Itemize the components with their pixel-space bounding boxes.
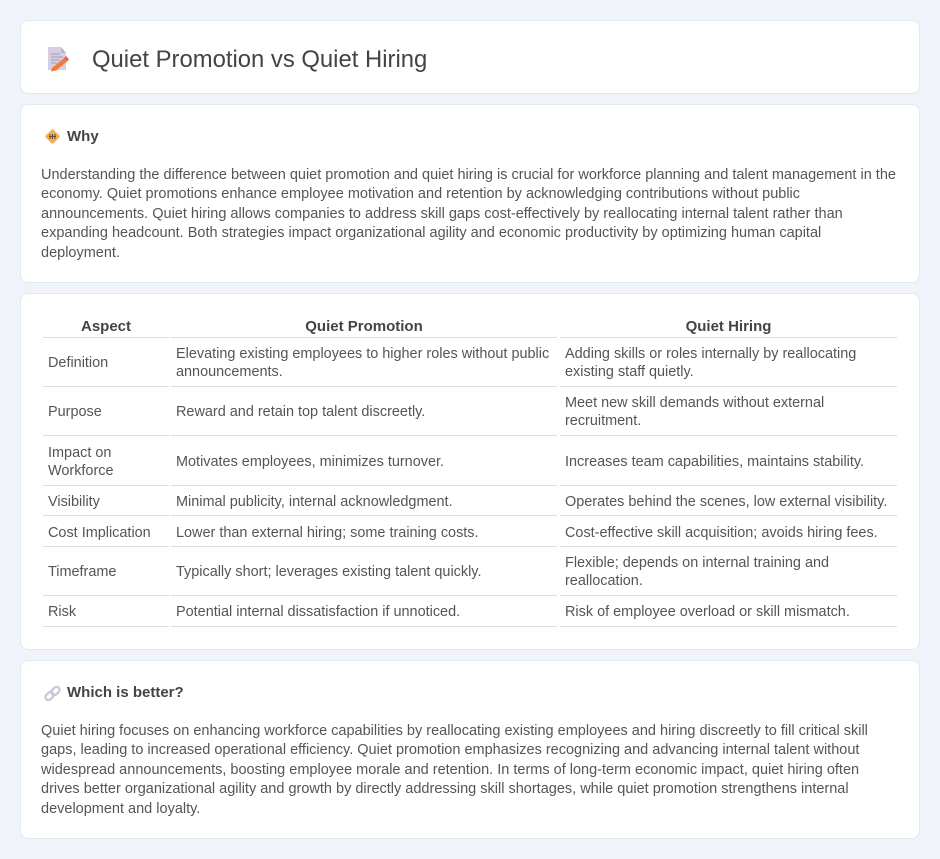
row: cost implication: Cost-effective skill acquisition; avoids hiring fees. xyxy=(565,525,878,541)
text block: why paragraph: deployment. xyxy=(41,245,120,261)
row: risk: Potential internal dissatisfaction if unnoticed. xyxy=(176,604,460,620)
text block: which is better paragraph xyxy=(41,723,868,817)
table header: Aspect xyxy=(81,318,131,335)
table header: Quiet Promotion xyxy=(305,318,423,335)
heading: which is better: Which is better? xyxy=(67,684,184,701)
text block: which is better paragraph: drives better organizational agility and growth by directly addressing skill shortages, while quiet promotion strengthens internal xyxy=(41,781,849,797)
row: impact on workforce: Motivates employees, minimizes turnover. xyxy=(176,454,444,470)
row: impact on workforce xyxy=(43,445,897,486)
row: risk xyxy=(43,604,897,627)
icon: document with pencil xyxy=(48,47,69,72)
heading: why: Why xyxy=(67,128,99,145)
row: definition: announcements. xyxy=(176,364,283,380)
row: purpose: Reward and retain top talent discreetly. xyxy=(176,404,425,420)
row: definition: Definition xyxy=(48,355,108,371)
text block: why paragraph: expanding headcount. Both strategies impact organizational agility and economic productivity by optimizing human capital xyxy=(41,225,821,241)
row: definition: Adding skills or roles internally by reallocating xyxy=(565,346,856,362)
row: risk: Risk of employee overload or skill mismatch. xyxy=(565,604,850,620)
row: visibility: Operates behind the scenes, low external visibility. xyxy=(565,494,887,510)
text block: which is better paragraph: widespread announcements, boosting employee morale and retention. In terms of long-term economic impact, quiet hiring often xyxy=(41,762,859,778)
row: timeframe: Typically short; leverages existing talent quickly. xyxy=(176,564,481,580)
row: impact on workforce: Increases team capabilities, maintains stability. xyxy=(565,454,864,470)
row: definition: existing staff quietly. xyxy=(565,364,694,380)
row: definition xyxy=(43,346,897,387)
row: timeframe: Timeframe xyxy=(48,564,116,580)
table header: Quiet Hiring xyxy=(686,318,771,335)
text block: why paragraph: economy. Quiet promotions enhance employee motivation and retention by acknowledging contributions without public xyxy=(41,186,800,202)
row: risk: Risk xyxy=(48,604,76,620)
row: impact on workforce: Impact on xyxy=(48,445,111,461)
text block: which is better paragraph: development and loyalty. xyxy=(41,801,200,817)
row: visibility: Visibility xyxy=(48,494,100,510)
icon: chain link xyxy=(44,686,61,702)
row: cost implication xyxy=(43,525,897,547)
icon: warning diamond xyxy=(45,129,60,144)
panel: comparison table xyxy=(20,293,920,650)
row: visibility xyxy=(43,494,897,516)
row: purpose: Meet new skill demands without external xyxy=(565,395,824,411)
text block: which is better paragraph: gaps, leading to increased operational efficiency. Quiet promotion emphasizes recognizing and advancing internal talent without xyxy=(41,742,859,758)
panel: title header xyxy=(20,20,920,94)
text block: which is better paragraph: Quiet hiring focuses on enhancing workforce capabilities by reallocating existing employees and hiring discreetly to fill critical skill xyxy=(41,723,868,739)
row: timeframe: Flexible; depends on internal training and xyxy=(565,555,829,571)
text block: why paragraph xyxy=(41,167,896,261)
row: visibility: Minimal publicity, internal acknowledgment. xyxy=(176,494,453,510)
row: definition: Elevating existing employees to higher roles without public xyxy=(176,346,549,362)
row: timeframe xyxy=(43,555,897,596)
text block: why paragraph: Understanding the difference between quiet promotion and quiet hiring is crucial for workforce planning and talent management in the xyxy=(41,167,896,183)
table header xyxy=(43,318,897,338)
row: cost implication: Cost Implication xyxy=(48,525,151,541)
title: Quiet Promotion vs Quiet Hiring xyxy=(92,46,427,73)
row: purpose: recruitment. xyxy=(565,413,641,429)
row: purpose: Purpose xyxy=(48,404,102,420)
row: timeframe: reallocation. xyxy=(565,573,643,589)
row: impact on workforce: Workforce xyxy=(48,463,114,479)
panel: which is better xyxy=(20,660,920,839)
row: purpose xyxy=(43,395,897,436)
panel: why xyxy=(20,104,920,283)
text block: why paragraph: announcements. Quiet hiring allows companies to address skill gaps cost-effectively by reallocating internal talent rather than xyxy=(41,206,843,222)
row: cost implication: Lower than external hiring; some training costs. xyxy=(176,525,479,541)
